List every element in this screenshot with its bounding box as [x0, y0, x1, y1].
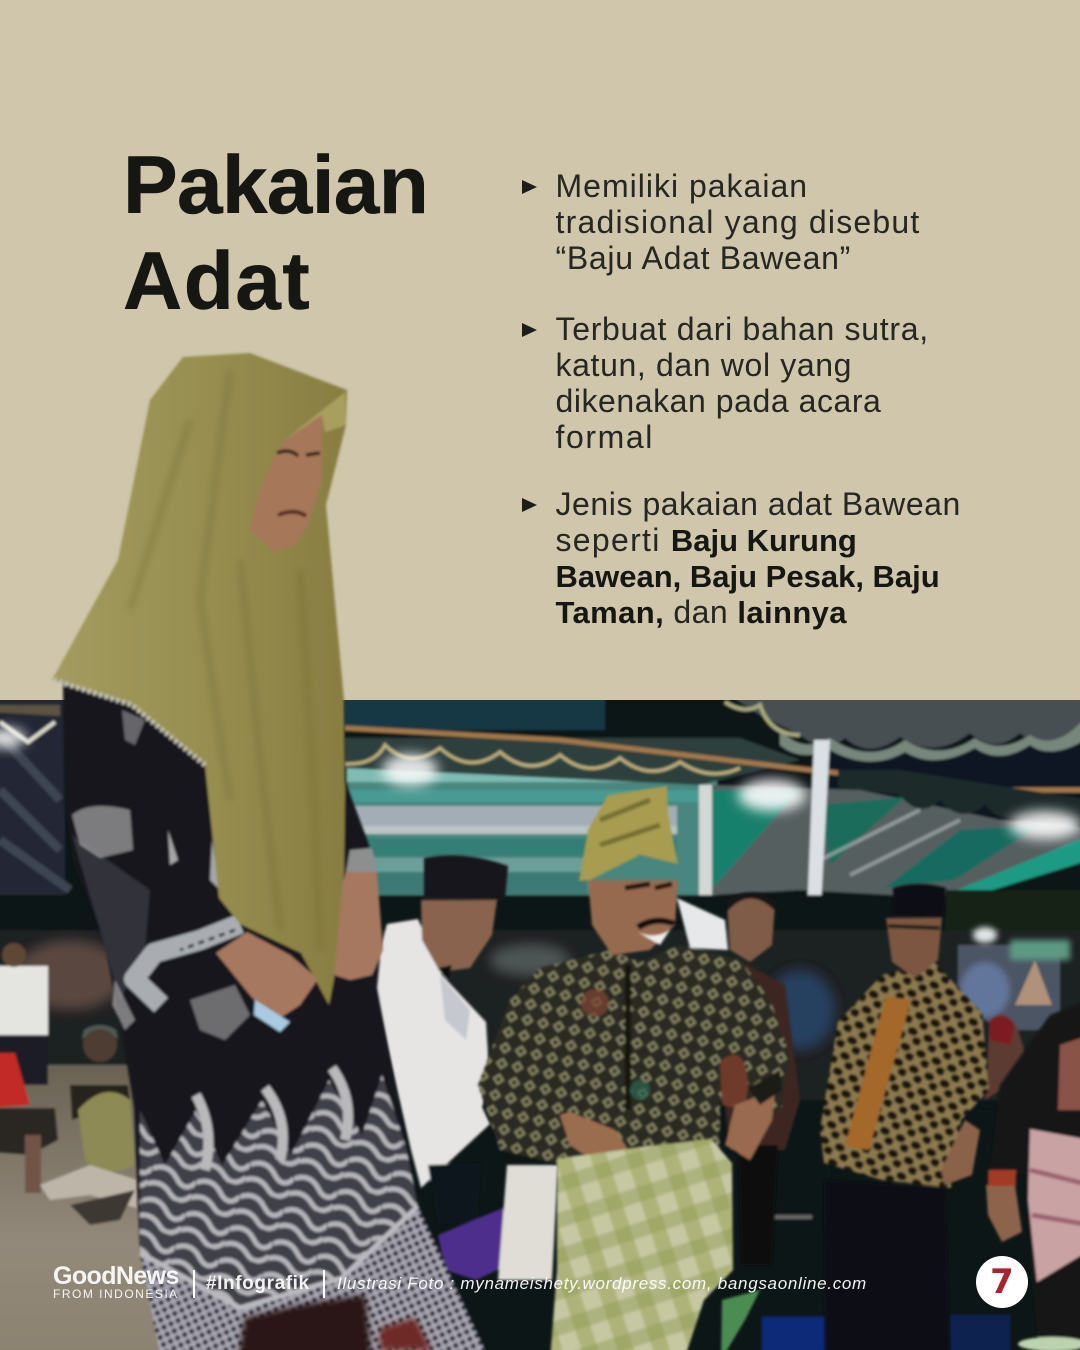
footer divider right	[323, 1270, 325, 1298]
photo: crowd and sandy ground	[0, 927, 1080, 1350]
page number badge	[976, 1256, 1028, 1308]
title: Adat	[123, 236, 311, 327]
bullet arrow 3	[522, 498, 537, 512]
photo: woman in black floral dress with olive hijab	[52, 353, 490, 1350]
bullet text 3: Bawean, Baju Pesak, Baju	[556, 559, 940, 594]
title: Pakaian	[123, 140, 428, 231]
page number badge: 7	[990, 1262, 1014, 1302]
bullet text 1: Memiliki pakaian	[556, 168, 808, 204]
title	[123, 140, 428, 327]
bullet text 2: formal	[556, 419, 654, 455]
footer divider left	[193, 1270, 195, 1298]
bullet text 3: seperti Baju Kurung	[556, 522, 857, 558]
photo: man in white with black cap	[372, 855, 558, 1280]
photo background: night sky, tents and valances	[0, 690, 1080, 1350]
bullet text 2	[556, 311, 929, 455]
footer logo: GoodNews from Indonesia: FROM INDONESIA	[53, 1287, 179, 1301]
footer hashtag: #Infografik	[206, 1273, 310, 1294]
bullet text 3: Jenis pakaian adat Bawean	[556, 486, 961, 522]
bullet 2	[522, 311, 929, 455]
photo: man with batik shirt, songkok and checked sarong	[478, 786, 800, 1350]
bullet text 1: “Baju Adat Bawean”	[556, 240, 851, 276]
bullet arrow 2	[522, 323, 537, 337]
bullet text 2: Terbuat dari bahan sutra,	[556, 311, 929, 347]
bullet 1	[522, 168, 921, 276]
footer photo credit: Ilustrasi Foto : mynameishety.wordpress.com, bangsaonline.com	[337, 1274, 867, 1293]
bullet text 2: dikenakan pada acara	[556, 383, 881, 419]
bullet text 1: tradisional yang disebut	[556, 204, 921, 240]
photo: Bawean traditional dress event with woman in hijab	[0, 352, 1080, 1350]
bullet 3	[522, 486, 961, 630]
photo: man with glasses in leopard batik shirt	[820, 884, 989, 1350]
footer logo: GoodNews from Indonesia: GoodNews	[53, 1262, 179, 1290]
bullet text 3	[556, 486, 961, 630]
bullet text 2: katun, dan wol yang	[556, 347, 852, 383]
photo: person at right edge with pink sarong	[986, 1000, 1080, 1350]
bullet text 3: Taman, dan lainnya	[556, 594, 847, 630]
bullet arrow 1	[522, 180, 537, 194]
bullet text 1	[556, 168, 921, 276]
